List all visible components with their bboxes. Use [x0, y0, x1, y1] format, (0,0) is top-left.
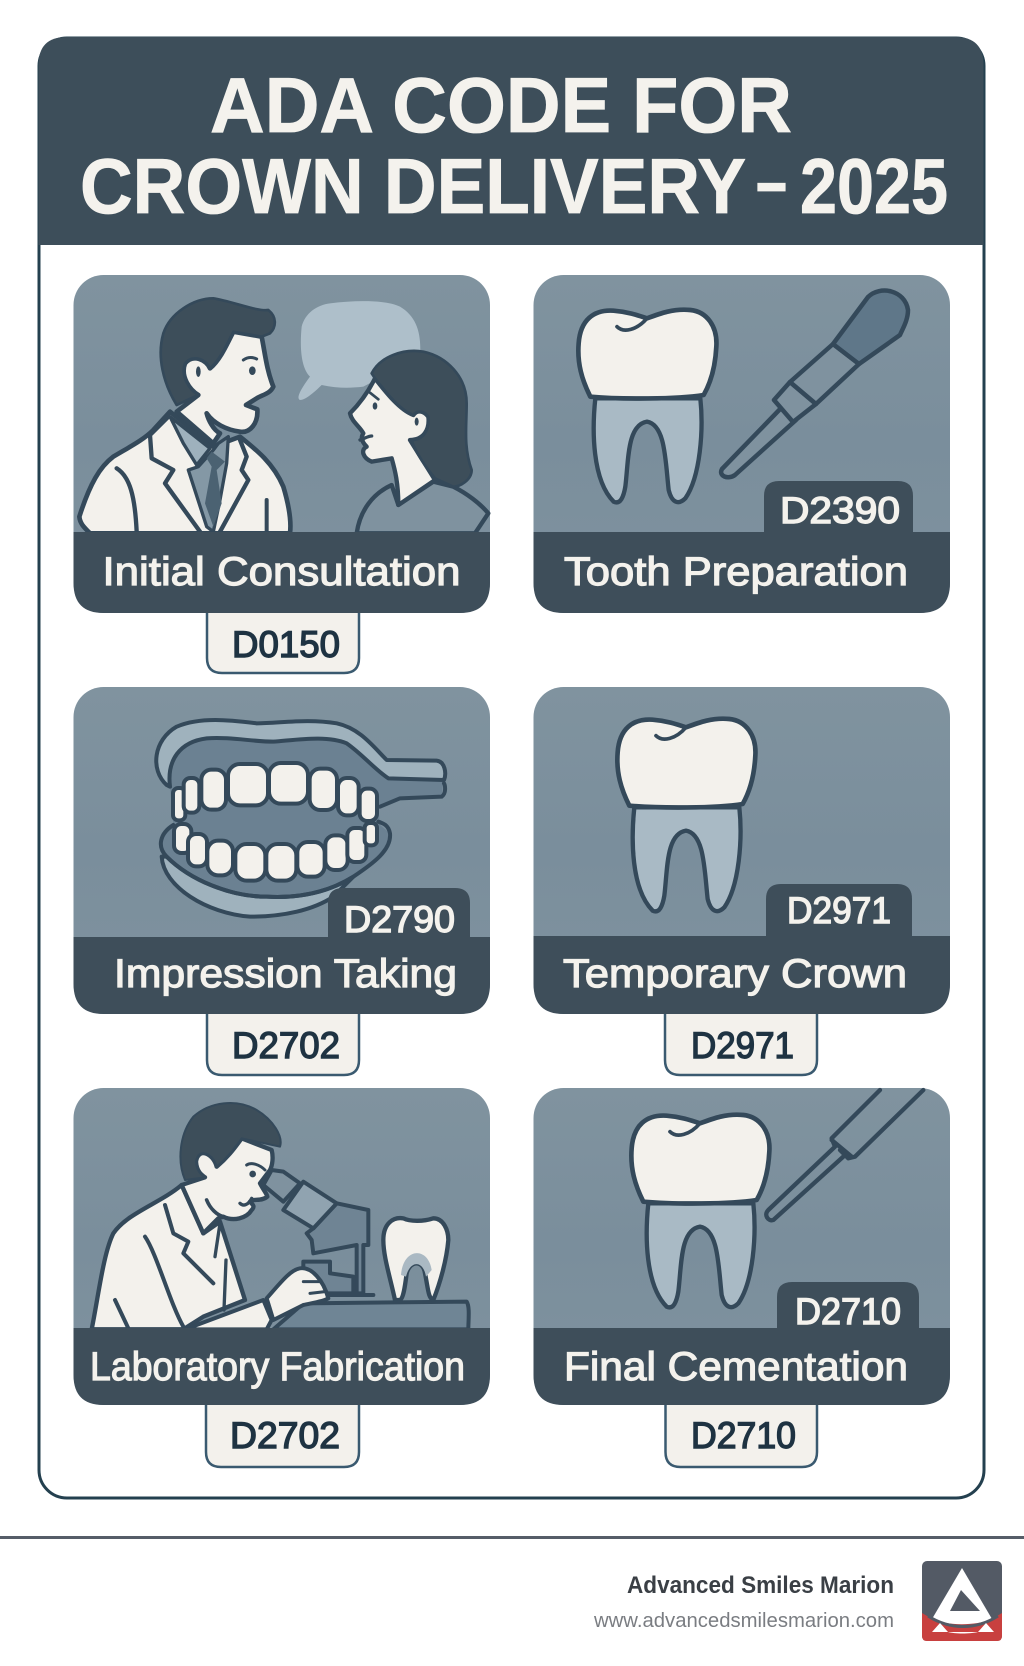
- header banner: [38, 37, 984, 245]
- title: 2025: [800, 142, 948, 230]
- icon: impression tray and teeth: [156, 720, 445, 917]
- title: ADA CODE FOR: [210, 61, 792, 149]
- title: [80, 61, 948, 230]
- inset code: D2390: [764, 481, 913, 533]
- code tab: D2971: [665, 1014, 817, 1075]
- lower teeth: [174, 823, 377, 881]
- title: CROWN DELIVERY: [80, 142, 746, 230]
- panel: temporary crown: [534, 687, 950, 1014]
- code tab: D2971: D2971: [691, 1025, 794, 1066]
- label band: [74, 532, 490, 613]
- label band: [534, 936, 950, 1014]
- code tab: D2702: [207, 1014, 359, 1075]
- inset code: D2971: [766, 884, 912, 938]
- panel: final cementation: [534, 1088, 950, 1405]
- upper teeth: [173, 763, 377, 821]
- inset code: D2710: [777, 1282, 919, 1332]
- label: Initial Consultation: [102, 550, 460, 594]
- inset code: D2790: [328, 888, 470, 940]
- icon: tooth: [617, 719, 755, 911]
- icon: technician at microscope: [92, 1103, 469, 1329]
- label band: [534, 1328, 950, 1405]
- icon: brand logo: [922, 1561, 1002, 1641]
- icon: tooth: [631, 1090, 923, 1307]
- inset code: D2710: D2710: [795, 1291, 901, 1332]
- code tab: D2702: D2702: [230, 1415, 340, 1456]
- panel: laboratory fabrication: [74, 1088, 490, 1405]
- label band: [74, 937, 490, 1014]
- code tab: D0150: [207, 613, 359, 673]
- label: Temporary Crown: [563, 952, 907, 996]
- icon: dental instrument: [721, 291, 908, 477]
- label band: [534, 532, 950, 613]
- code tab: D2710: [666, 1405, 817, 1467]
- inset code: D2971: D2971: [787, 890, 891, 931]
- label: Laboratory Fabrication: [90, 1345, 465, 1389]
- code tab: D0150: D0150: [232, 624, 340, 665]
- title: –: [756, 137, 787, 225]
- inset code: D2390: D2390: [780, 490, 900, 531]
- footer website: www.advancedsmilesmarion.com: [593, 1610, 894, 1632]
- label: Final Cementation: [564, 1345, 908, 1389]
- code tab: D2702: [206, 1405, 359, 1467]
- inset code: D2790: D2790: [344, 899, 455, 940]
- icon: tooth: [578, 310, 716, 502]
- code tab: D2702: D2702: [232, 1025, 340, 1066]
- panel: tooth preparation: [534, 275, 950, 613]
- panel: initial consultation: [74, 275, 490, 613]
- label: Impression Taking: [114, 952, 457, 996]
- footer brand name: Advanced Smiles Marion: [627, 1572, 894, 1599]
- label: Tooth Preparation: [564, 550, 908, 594]
- dental instrument: [766, 1090, 923, 1220]
- icon: dentist talking with patient: [79, 298, 488, 533]
- panel: impression taking: [74, 687, 490, 1014]
- small tooth: [383, 1218, 448, 1300]
- microscope: [263, 1170, 469, 1329]
- code tab: D2710: D2710: [691, 1415, 796, 1456]
- label band: [74, 1328, 490, 1405]
